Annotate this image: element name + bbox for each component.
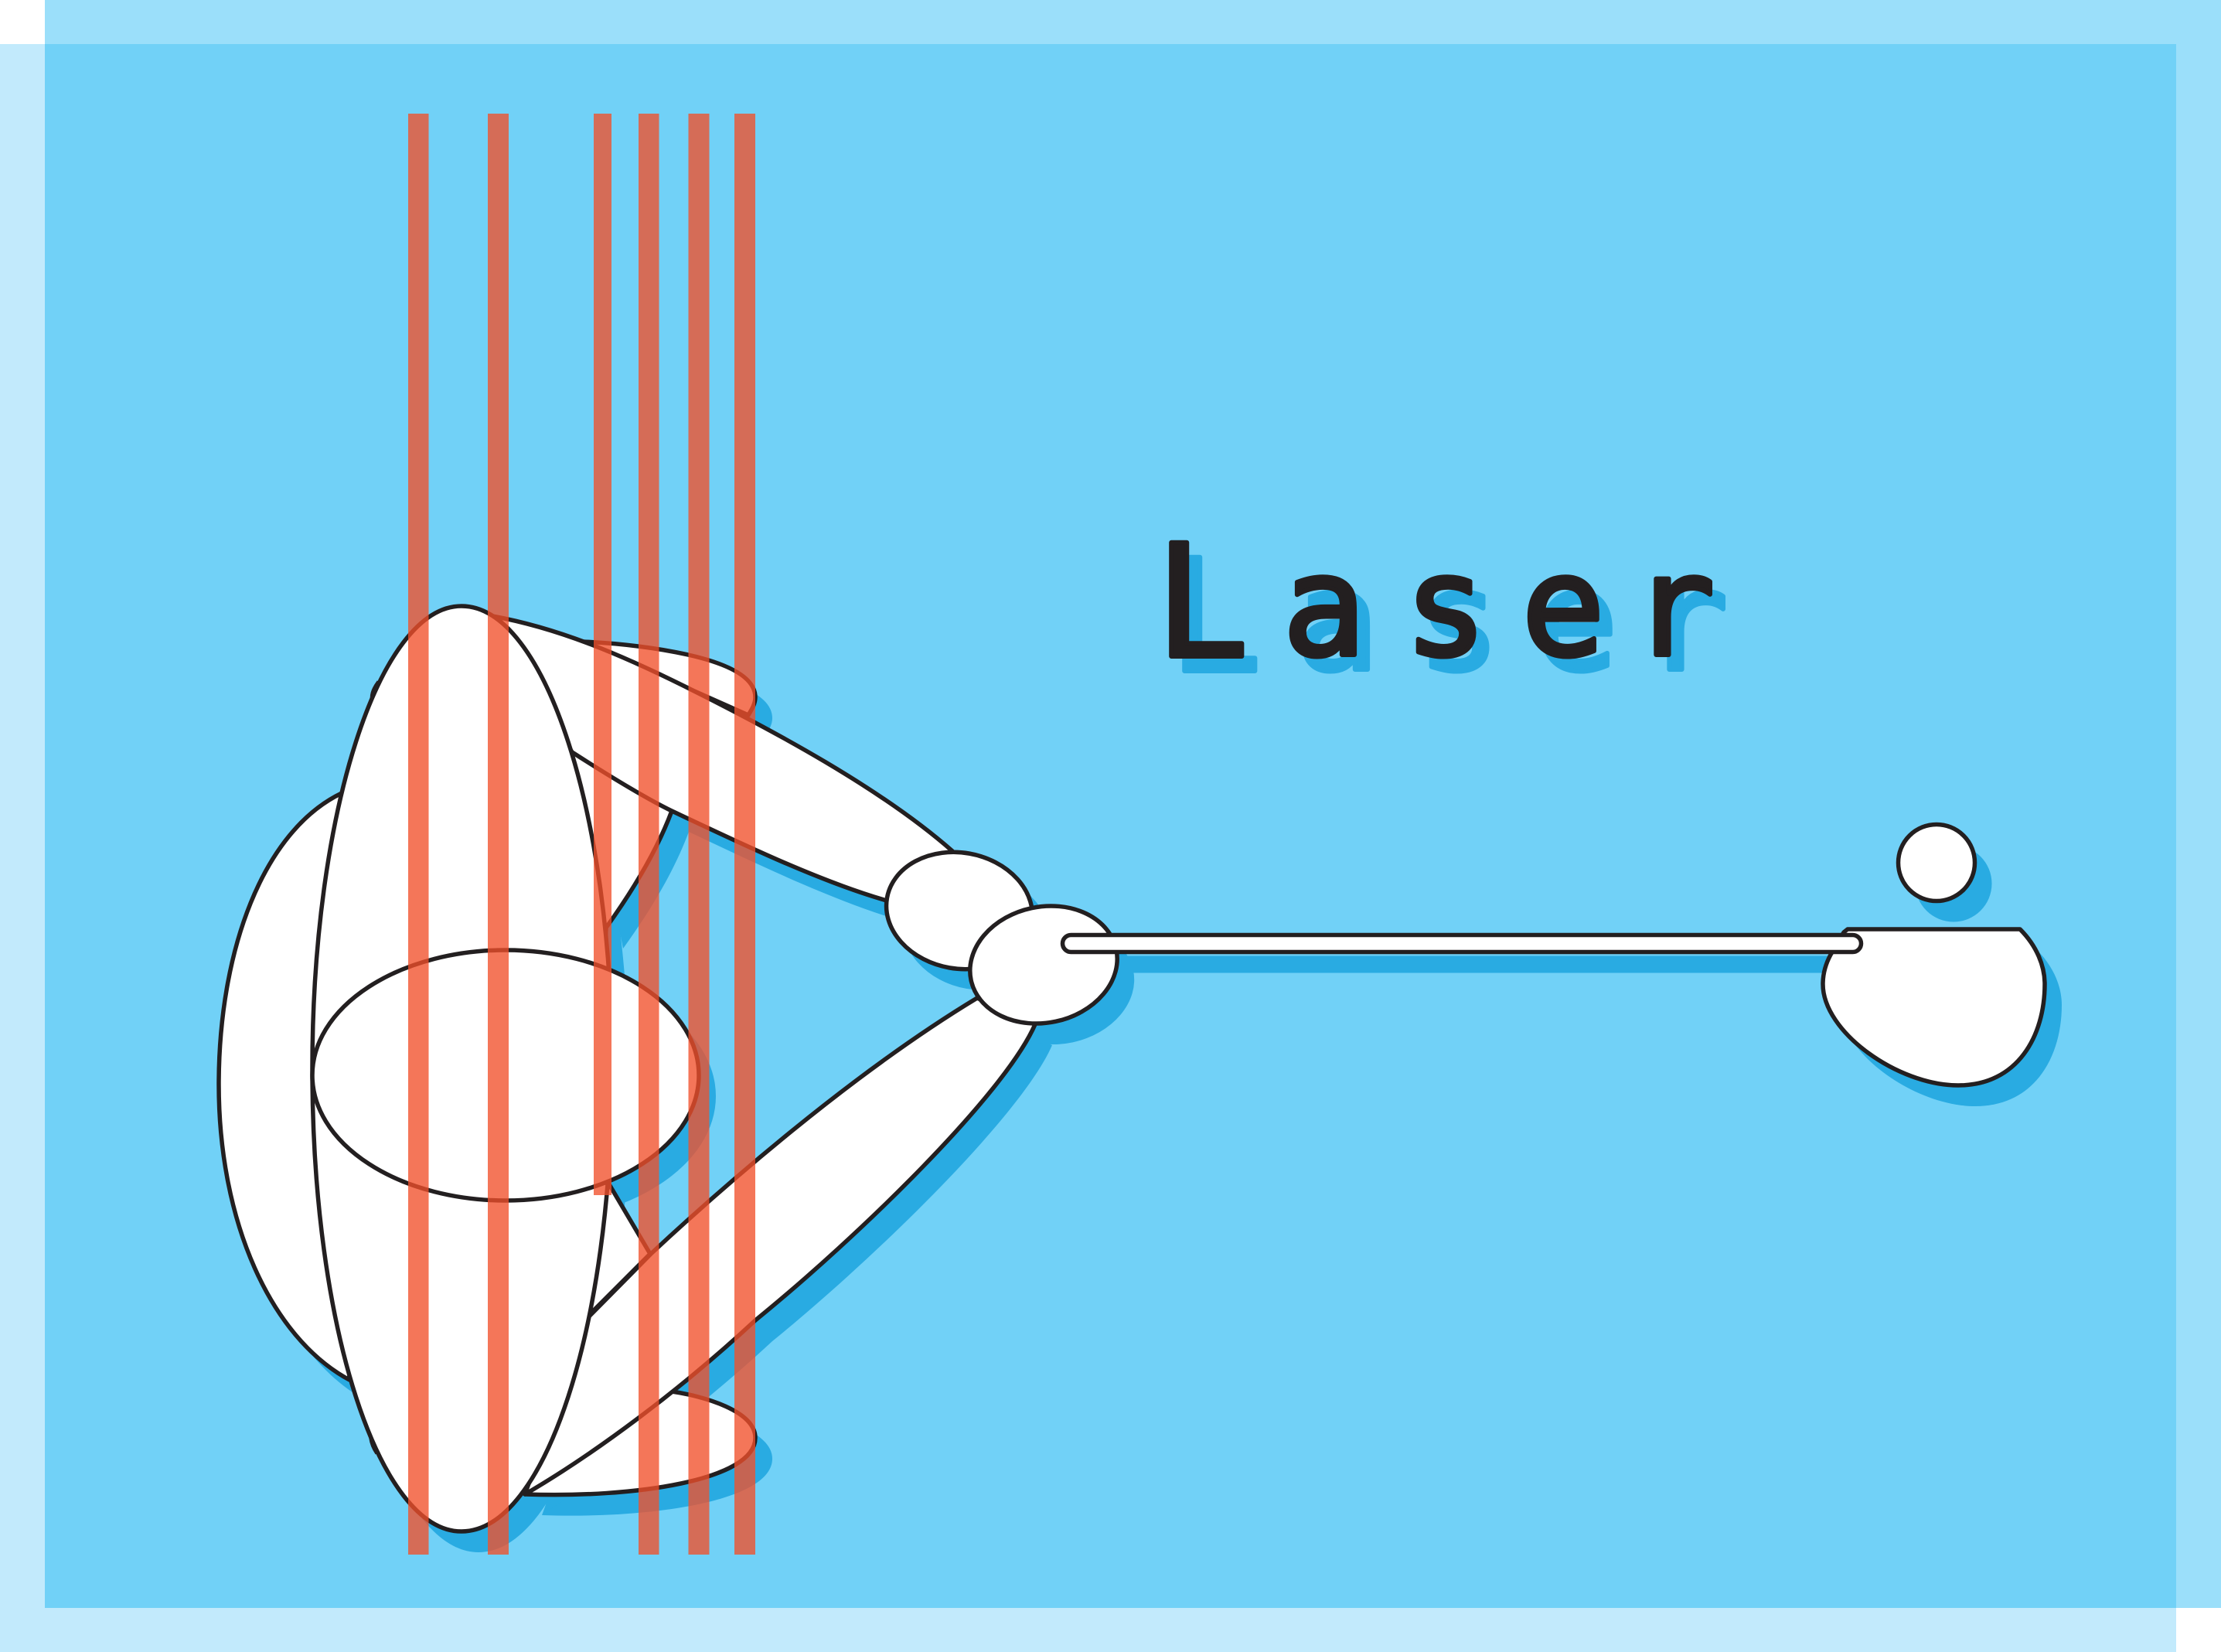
beam 6	[734, 114, 755, 1555]
title: Laser: aser	[1283, 526, 1715, 688]
rear edge marks	[371, 682, 379, 1453]
lower arm	[525, 998, 1035, 1494]
joint: upper	[877, 841, 1042, 980]
title shadow: Laser	[1168, 526, 1729, 708]
lower lobe	[525, 1391, 755, 1495]
drop shadow of the optical assembly	[236, 627, 2062, 1552]
title: Laser	[1155, 511, 1715, 693]
inner lens ellipse	[312, 950, 699, 1201]
laser beams	[408, 114, 755, 1555]
laser optics assembly	[219, 606, 2045, 1531]
beam 1	[408, 114, 428, 1555]
upper lobe	[583, 642, 755, 715]
beam 5	[688, 114, 710, 1555]
beam 2	[488, 114, 509, 1555]
lower inner body	[588, 1160, 650, 1316]
upper arm	[492, 616, 952, 901]
beam 4	[639, 114, 659, 1555]
small circle	[1899, 824, 1974, 901]
title shadow: Laser: L	[1168, 526, 1262, 708]
title shadow: Laser: aser	[1296, 541, 1729, 703]
joint: lower	[959, 893, 1128, 1037]
title: Laser: L	[1155, 511, 1249, 693]
upper inner body	[572, 752, 672, 1005]
beam 3	[594, 114, 611, 1195]
back lens shell	[219, 793, 349, 1380]
main lens	[312, 606, 612, 1531]
connecting rod	[1062, 935, 1862, 952]
detector bowl	[1823, 929, 2045, 1085]
